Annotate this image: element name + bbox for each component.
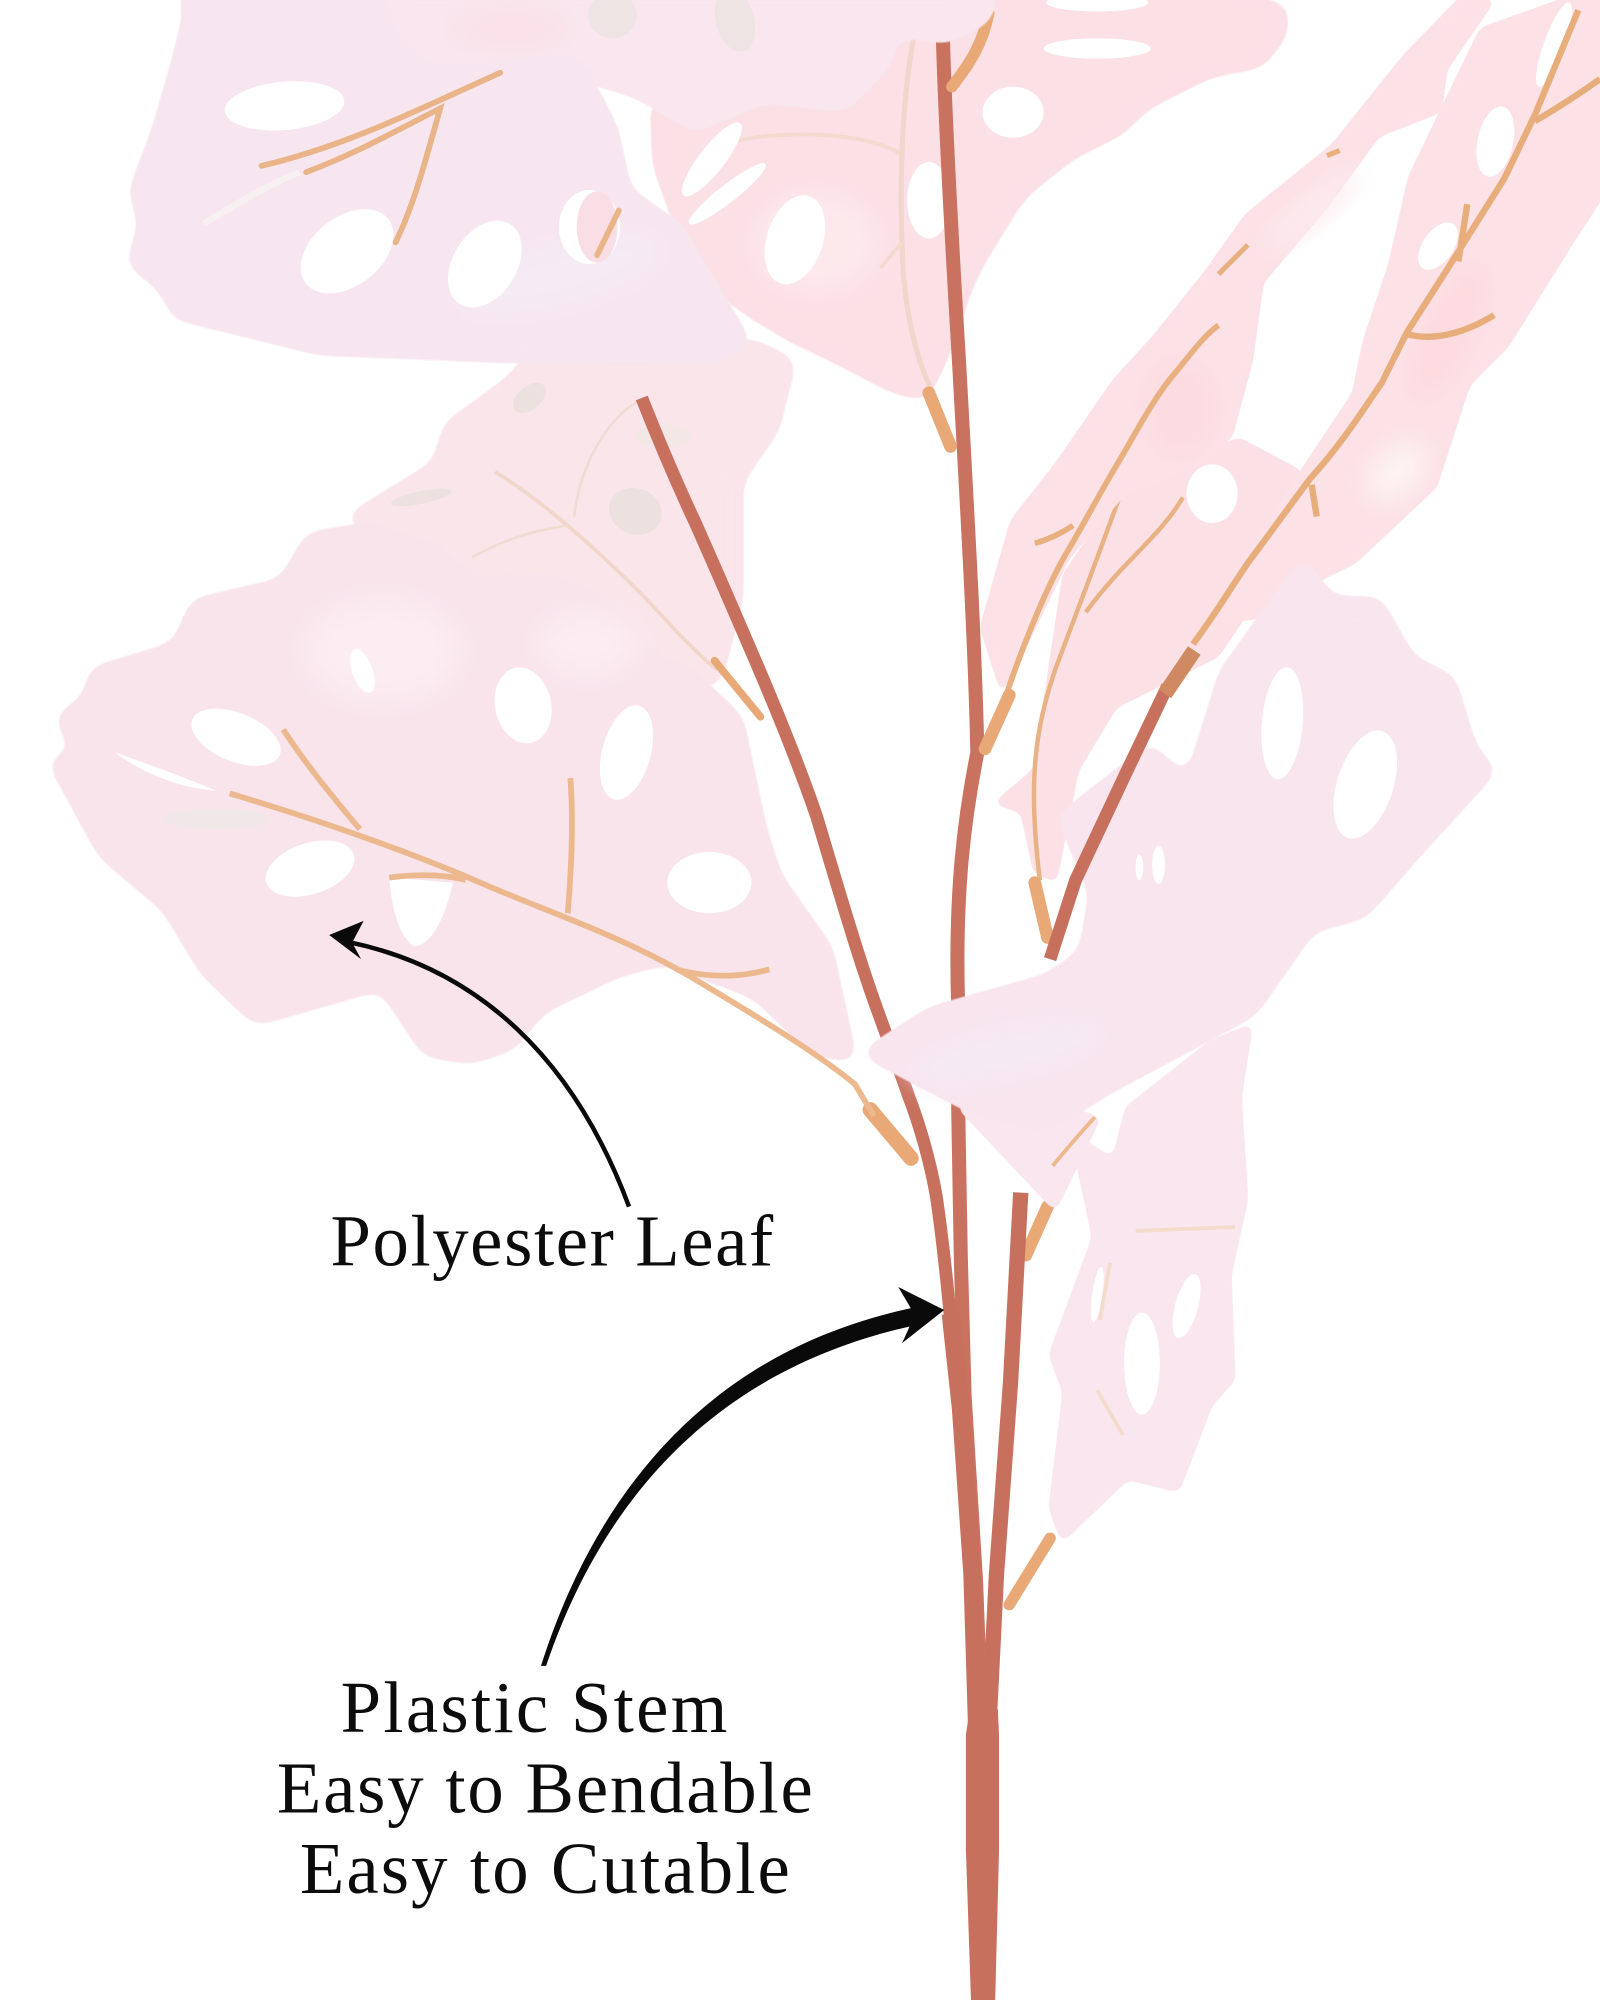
leaf holes: [1088, 1266, 1206, 1415]
arrow: pointing to polyester leaf: [329, 921, 629, 1207]
leaf holes: [223, 76, 620, 321]
leaf holes: [1410, 0, 1579, 277]
leaf veins: [1193, 10, 1600, 644]
leaf: large left leaf: [46, 523, 874, 1116]
stem: centre stem with petioles: [715, 13, 1050, 1747]
stem: right branch lower part: [989, 1193, 1021, 1728]
leaf veins: [230, 730, 874, 1116]
leaf holes: [674, 0, 1151, 292]
leaf: centre right back leaf: [993, 438, 1304, 883]
leaf holes: [588, 0, 762, 56]
label: plastic stem features: Easy to Cutable: [300, 1828, 790, 1909]
leaf holes: [115, 646, 752, 946]
leaf veins: [262, 73, 619, 255]
leaf: top left leaf: [126, 0, 753, 362]
leaf hole: [1187, 464, 1238, 523]
stem: base: [966, 1709, 999, 2000]
leaf fold tint: [163, 809, 270, 829]
leaf: top centre front leaf: [376, 0, 1002, 133]
arrow: pointing to plastic stem: [541, 1287, 944, 1666]
leaf: lower right leaf: [1049, 1023, 1253, 1543]
label: plastic stem features: Plastic Stem: [341, 1667, 727, 1748]
leaf: upper right long leaf: [980, 0, 1495, 746]
leaf: back left leaf behind large leaf: [344, 339, 796, 695]
leaf: small curled leaf under front right leaf: [954, 1099, 1101, 1212]
leaf: top centre back leaf: [651, 0, 1289, 401]
leaf holes: [390, 377, 692, 542]
leaf holes: [1136, 666, 1409, 884]
label: polyester leaf: Polyester Leaf: [330, 1200, 774, 1281]
stem: left branch: [642, 398, 977, 1741]
leaf: front right leaf: [857, 556, 1498, 1133]
petiole bulbs: [715, 13, 1050, 1605]
stem: right branch upper part with bulb: [1050, 651, 1194, 959]
label: plastic stem features: [277, 1667, 813, 1909]
leaf: far right long leaf: [1193, 0, 1600, 644]
label: plastic stem features: Easy to Bendable: [277, 1748, 813, 1828]
